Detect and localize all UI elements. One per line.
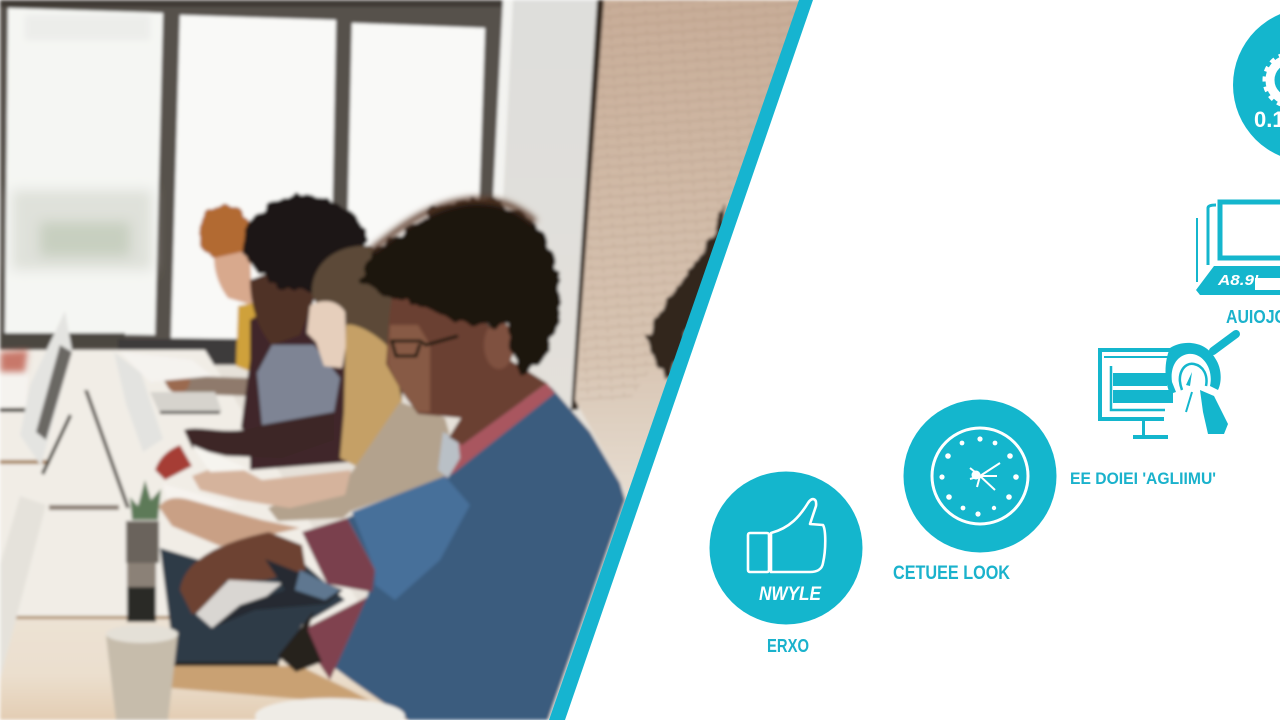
touch hand: [1166, 343, 1221, 394]
front person: [159, 199, 625, 720]
bare forearm: [159, 498, 300, 546]
icon: thumbs up: [748, 499, 825, 572]
third person: [192, 246, 449, 521]
foreground blur white: [255, 698, 405, 720]
laptop label: A8.9': [1217, 272, 1258, 289]
mousepad: [160, 548, 345, 664]
clock ticks: [939, 436, 1019, 517]
red object: [155, 445, 192, 480]
white wall: [480, 0, 605, 410]
second person: [184, 195, 365, 470]
paper cup: [106, 625, 178, 720]
distant person hair at right: [648, 205, 726, 380]
gear: [1270, 59, 1280, 101]
diagonal teal stripe: [549, 0, 813, 720]
brick wall: [572, 0, 799, 492]
back person: [163, 207, 258, 396]
long desk: [0, 346, 356, 625]
face and neck: [386, 297, 547, 445]
glasses: [390, 336, 458, 356]
label: clock caption: CETUEE LOOK: [893, 563, 1010, 584]
icon: thumbs up badge: [710, 472, 862, 624]
icon: gear badge: [1233, 8, 1280, 162]
blue sweater: [327, 387, 625, 720]
photo: students working at laptops: [0, 0, 810, 720]
label: thumbs up caption: ERXO: [767, 636, 809, 656]
icon: clock badge: [904, 400, 1056, 552]
white content panel: [565, 0, 1280, 720]
plant pot: [126, 480, 161, 622]
window wall frame: [0, 0, 520, 365]
hair: [360, 199, 560, 372]
icon: laptop: [1196, 202, 1280, 295]
icon: monitor with touch: [1100, 334, 1236, 439]
collar: [445, 383, 555, 478]
laptops row: [0, 311, 163, 680]
hand and mouse: [180, 532, 343, 628]
badge label: NWYLE: [759, 584, 822, 605]
label: monitor caption: EE DOIEI 'AGLIIMU': [1070, 469, 1216, 488]
clock hands: [970, 463, 1000, 490]
keyboard pads: [150, 392, 222, 414]
